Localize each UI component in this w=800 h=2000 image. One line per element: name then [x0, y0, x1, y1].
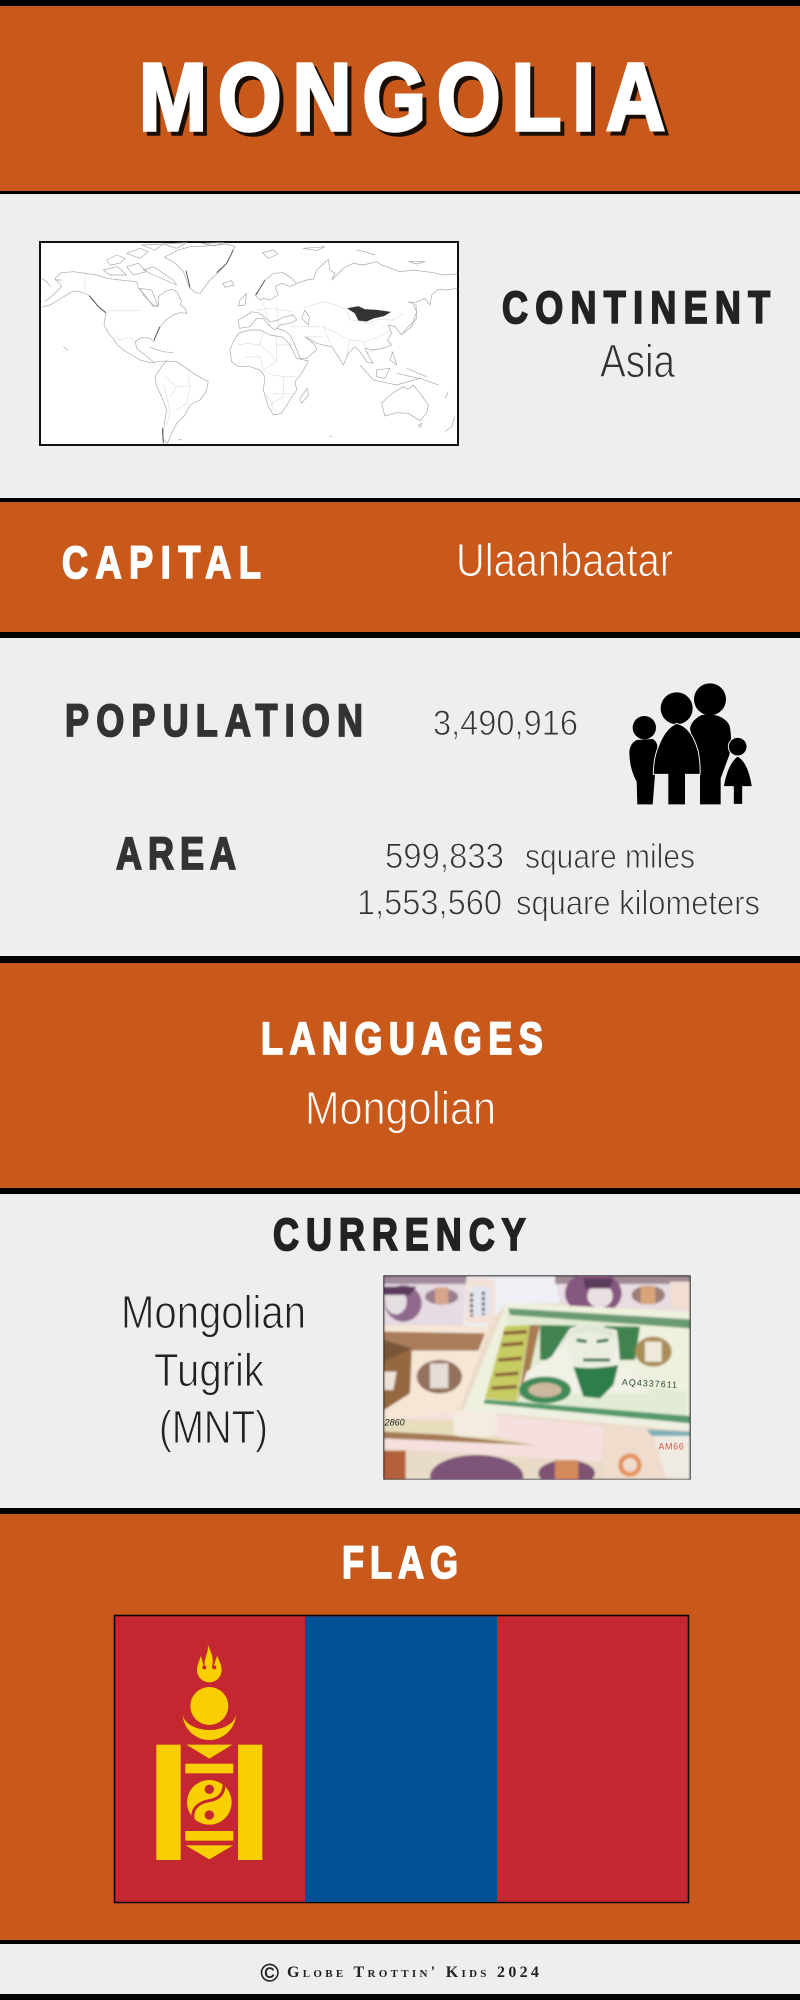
panel: languages	[0, 956, 800, 1194]
heading: population: POPULATION	[65, 695, 370, 746]
text: area values: 599,833	[385, 837, 504, 876]
map borders	[85, 273, 403, 427]
text: population number: 3,490,916	[433, 704, 578, 743]
heading: languages: LANGUAGES	[261, 1013, 549, 1064]
copyright credit: ©	[260, 1960, 280, 1988]
title: MONGOLIA	[139, 43, 676, 150]
heading: area: AREA	[116, 828, 242, 879]
Mongolia highlighted	[347, 306, 391, 321]
text: Mongolian: Mongolian	[305, 1082, 496, 1134]
heading: flag: FLAG	[342, 1537, 464, 1588]
panel: footer	[0, 1960, 800, 2000]
world map	[40, 242, 458, 445]
text: area values	[357, 837, 760, 922]
flag of Mongolia	[114, 1616, 688, 1902]
map coastlines	[42, 243, 457, 443]
panel: currency	[121, 1209, 691, 1498]
icon: soyombo emblem	[156, 1644, 262, 1860]
heading: currency: CURRENCY	[273, 1209, 533, 1260]
image: banknotes: 2860	[384, 1418, 405, 1428]
panel: flag	[0, 1508, 800, 1944]
text: currency name	[121, 1286, 306, 1453]
text: Asia: Asia	[600, 335, 675, 387]
copyright credit	[260, 1960, 542, 1988]
text: area values: square miles	[525, 838, 695, 876]
text: area values: 1,553,560	[357, 884, 502, 922]
text: area values: square kilometers	[516, 884, 760, 922]
text: currency name: (MNT)	[159, 1401, 268, 1453]
panel: population and area	[65, 683, 760, 922]
copyright credit: Globe Trottin' Kids 2024	[287, 1964, 542, 1981]
title: MONGOLIA	[143, 47, 680, 154]
icon: family	[629, 683, 752, 804]
text: currency name: Mongolian	[121, 1286, 306, 1338]
text: currency name: Tugrik	[154, 1344, 265, 1396]
panel: continent	[40, 242, 777, 445]
image: banknotes	[383, 1272, 691, 1498]
heading: capital: CAPITAL	[62, 537, 268, 588]
panel: title banner	[0, 0, 800, 194]
heading: continent: CONTINENT	[502, 282, 777, 333]
text: Ulaanbaatar: Ulaanbaatar	[456, 534, 673, 586]
panel: capital	[0, 498, 800, 638]
image: banknotes: AM66	[658, 1441, 684, 1451]
banknote serial numbers: AQ4337611	[622, 1377, 678, 1390]
